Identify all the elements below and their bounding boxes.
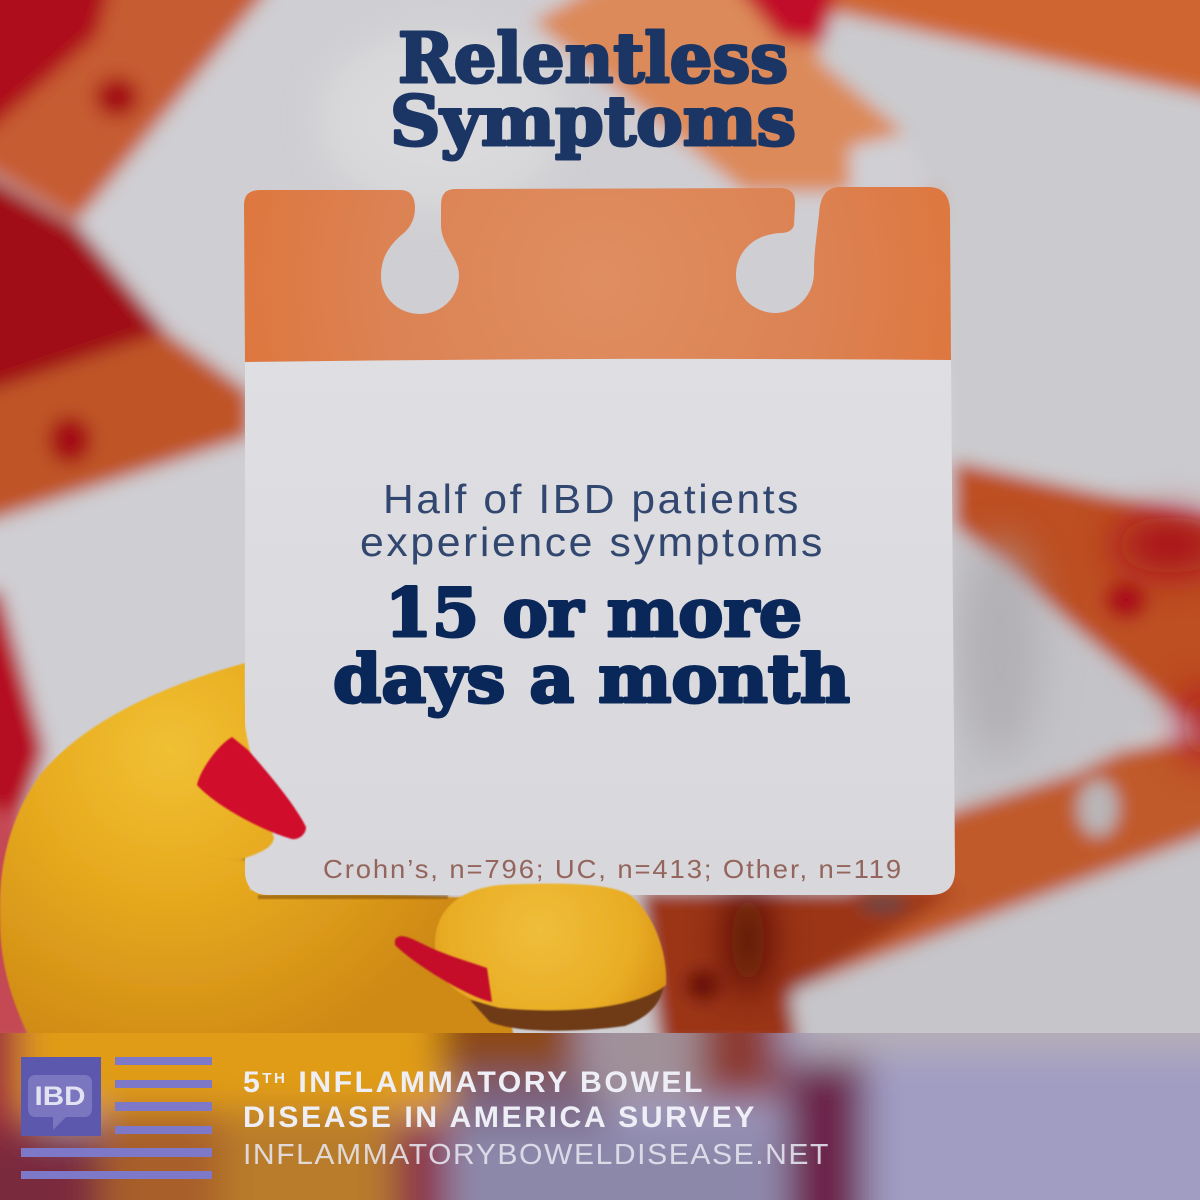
right upper white page xyxy=(818,14,1200,520)
intro text xyxy=(360,476,825,565)
key statistic: days a month xyxy=(333,640,850,718)
intro text: Half of IBD patients xyxy=(383,476,801,522)
calendar page xyxy=(244,187,955,895)
duck arm xyxy=(0,663,515,1040)
red nail lower xyxy=(395,936,492,1002)
title: Relentless xyxy=(398,19,788,99)
white sheet xyxy=(245,356,955,895)
IBD logo xyxy=(21,1057,212,1179)
title xyxy=(390,19,796,162)
IBD logo: IBD xyxy=(34,1081,86,1111)
survey name: DISEASE IN AMERICA SURVEY xyxy=(243,1101,757,1134)
survey name: INFLAMMATORY BOWEL xyxy=(287,1066,705,1099)
logo stripes xyxy=(21,1057,212,1179)
duck thumb fist xyxy=(395,884,666,1031)
red nail upper xyxy=(197,737,306,839)
survey name: 5 xyxy=(243,1066,262,1099)
arm crease shadow xyxy=(103,845,262,860)
orange header with binder notches xyxy=(244,187,951,362)
sample sizes note: Crohn’s, n=796; UC, n=413; Other, n=119 xyxy=(323,854,903,884)
card drop shadow on arm xyxy=(258,895,448,899)
survey name xyxy=(243,1066,757,1134)
duck finger over card xyxy=(101,690,306,860)
right orange pages xyxy=(954,461,1200,735)
footer band xyxy=(0,1033,1200,1200)
background: soft colour glows xyxy=(320,30,1200,995)
title: Symptoms xyxy=(390,82,796,162)
key statistic xyxy=(333,574,850,718)
top centre orange page xyxy=(533,0,905,192)
survey name: TH xyxy=(262,1070,287,1087)
intro text: experience symptoms xyxy=(360,519,825,565)
website: INFLAMMATORYBOWELDISEASE.NET xyxy=(243,1139,830,1171)
logo speech bubble xyxy=(28,1075,92,1130)
key statistic: 15 or more xyxy=(385,574,802,652)
